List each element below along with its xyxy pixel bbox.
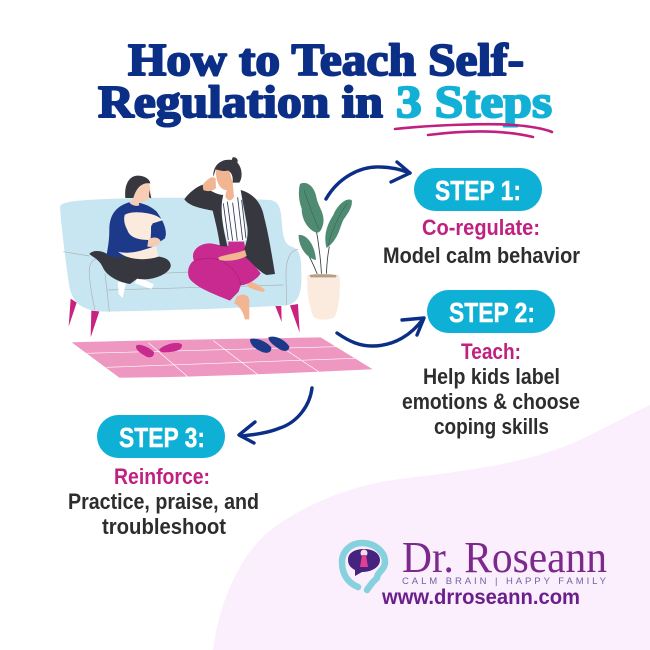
- logo wordmark: Dr. Roseann: [402, 533, 607, 582]
- step 1 text: Co-regulate:: [422, 215, 540, 240]
- illustration: family on sofa: [60, 157, 373, 378]
- plant pot: [307, 274, 340, 320]
- step 1 block: [383, 168, 580, 268]
- arrow: to step 1: [326, 162, 410, 199]
- step 1 pill: STEP 1:: [435, 175, 521, 206]
- rug: [72, 337, 373, 378]
- woman arm and hand at head: [203, 177, 216, 191]
- step 2 text: [402, 339, 580, 439]
- step 3 text: Reinforce:: [114, 464, 210, 489]
- arrow: to step 2: [337, 318, 424, 346]
- logo: Dr. Roseann: [342, 533, 607, 590]
- woman near foot: [234, 295, 249, 319]
- step 3 pill: STEP 3:: [119, 422, 205, 453]
- step 3 pill: [97, 415, 225, 458]
- logo tagline: CALM BRAIN | HAPPY FAMILY: [402, 576, 607, 587]
- arrow: to step 3: [239, 388, 312, 443]
- woman hand on lap: [218, 250, 247, 261]
- plant: [299, 183, 352, 320]
- step 2 pill: STEP 2:: [449, 297, 535, 328]
- step 3 text: troubleshoot: [102, 514, 227, 539]
- title underline scribble: [395, 124, 552, 137]
- step 2 block: [402, 290, 580, 439]
- step 2 text: Help kids label: [423, 364, 560, 389]
- woman: [184, 157, 275, 319]
- woman far foot: [247, 282, 265, 292]
- sofa: [60, 198, 301, 312]
- woman trousers: [188, 242, 261, 301]
- step 2 pill: [427, 290, 555, 333]
- step 2 text: emotions & choose: [402, 389, 580, 414]
- title: [98, 34, 552, 127]
- logo icon: head: [342, 543, 385, 590]
- step 1 pill: [414, 168, 542, 211]
- slippers pink: [136, 343, 182, 357]
- title: How to Teach Self-: [128, 34, 524, 85]
- child: [89, 176, 171, 298]
- step 3 text: Practice, praise, and: [68, 489, 259, 514]
- child arm: [151, 223, 166, 240]
- website url: www.drroseann.com: [381, 586, 580, 609]
- title: 3 Steps: [396, 76, 552, 127]
- woman jacket: [184, 185, 228, 247]
- child socks: [118, 282, 126, 298]
- woman shirt: [222, 192, 247, 241]
- woman hair: [213, 157, 242, 183]
- pillow: [124, 212, 163, 240]
- sofa legs: [69, 299, 300, 337]
- slippers navy: [250, 337, 289, 353]
- woman neck and face: [216, 169, 234, 200]
- child head: [129, 183, 151, 206]
- step 1 text: Model calm behavior: [383, 243, 580, 268]
- step 3 text: [68, 464, 259, 539]
- step 2 text: Teach:: [461, 339, 521, 364]
- child legs: [89, 251, 171, 284]
- title: Regulation in: [98, 76, 383, 127]
- child sweater: [107, 202, 166, 257]
- step 2 text: coping skills: [434, 414, 549, 439]
- background: pink curved panel: [213, 405, 650, 650]
- step 3 block: [68, 415, 259, 539]
- step 1 text: [383, 215, 580, 268]
